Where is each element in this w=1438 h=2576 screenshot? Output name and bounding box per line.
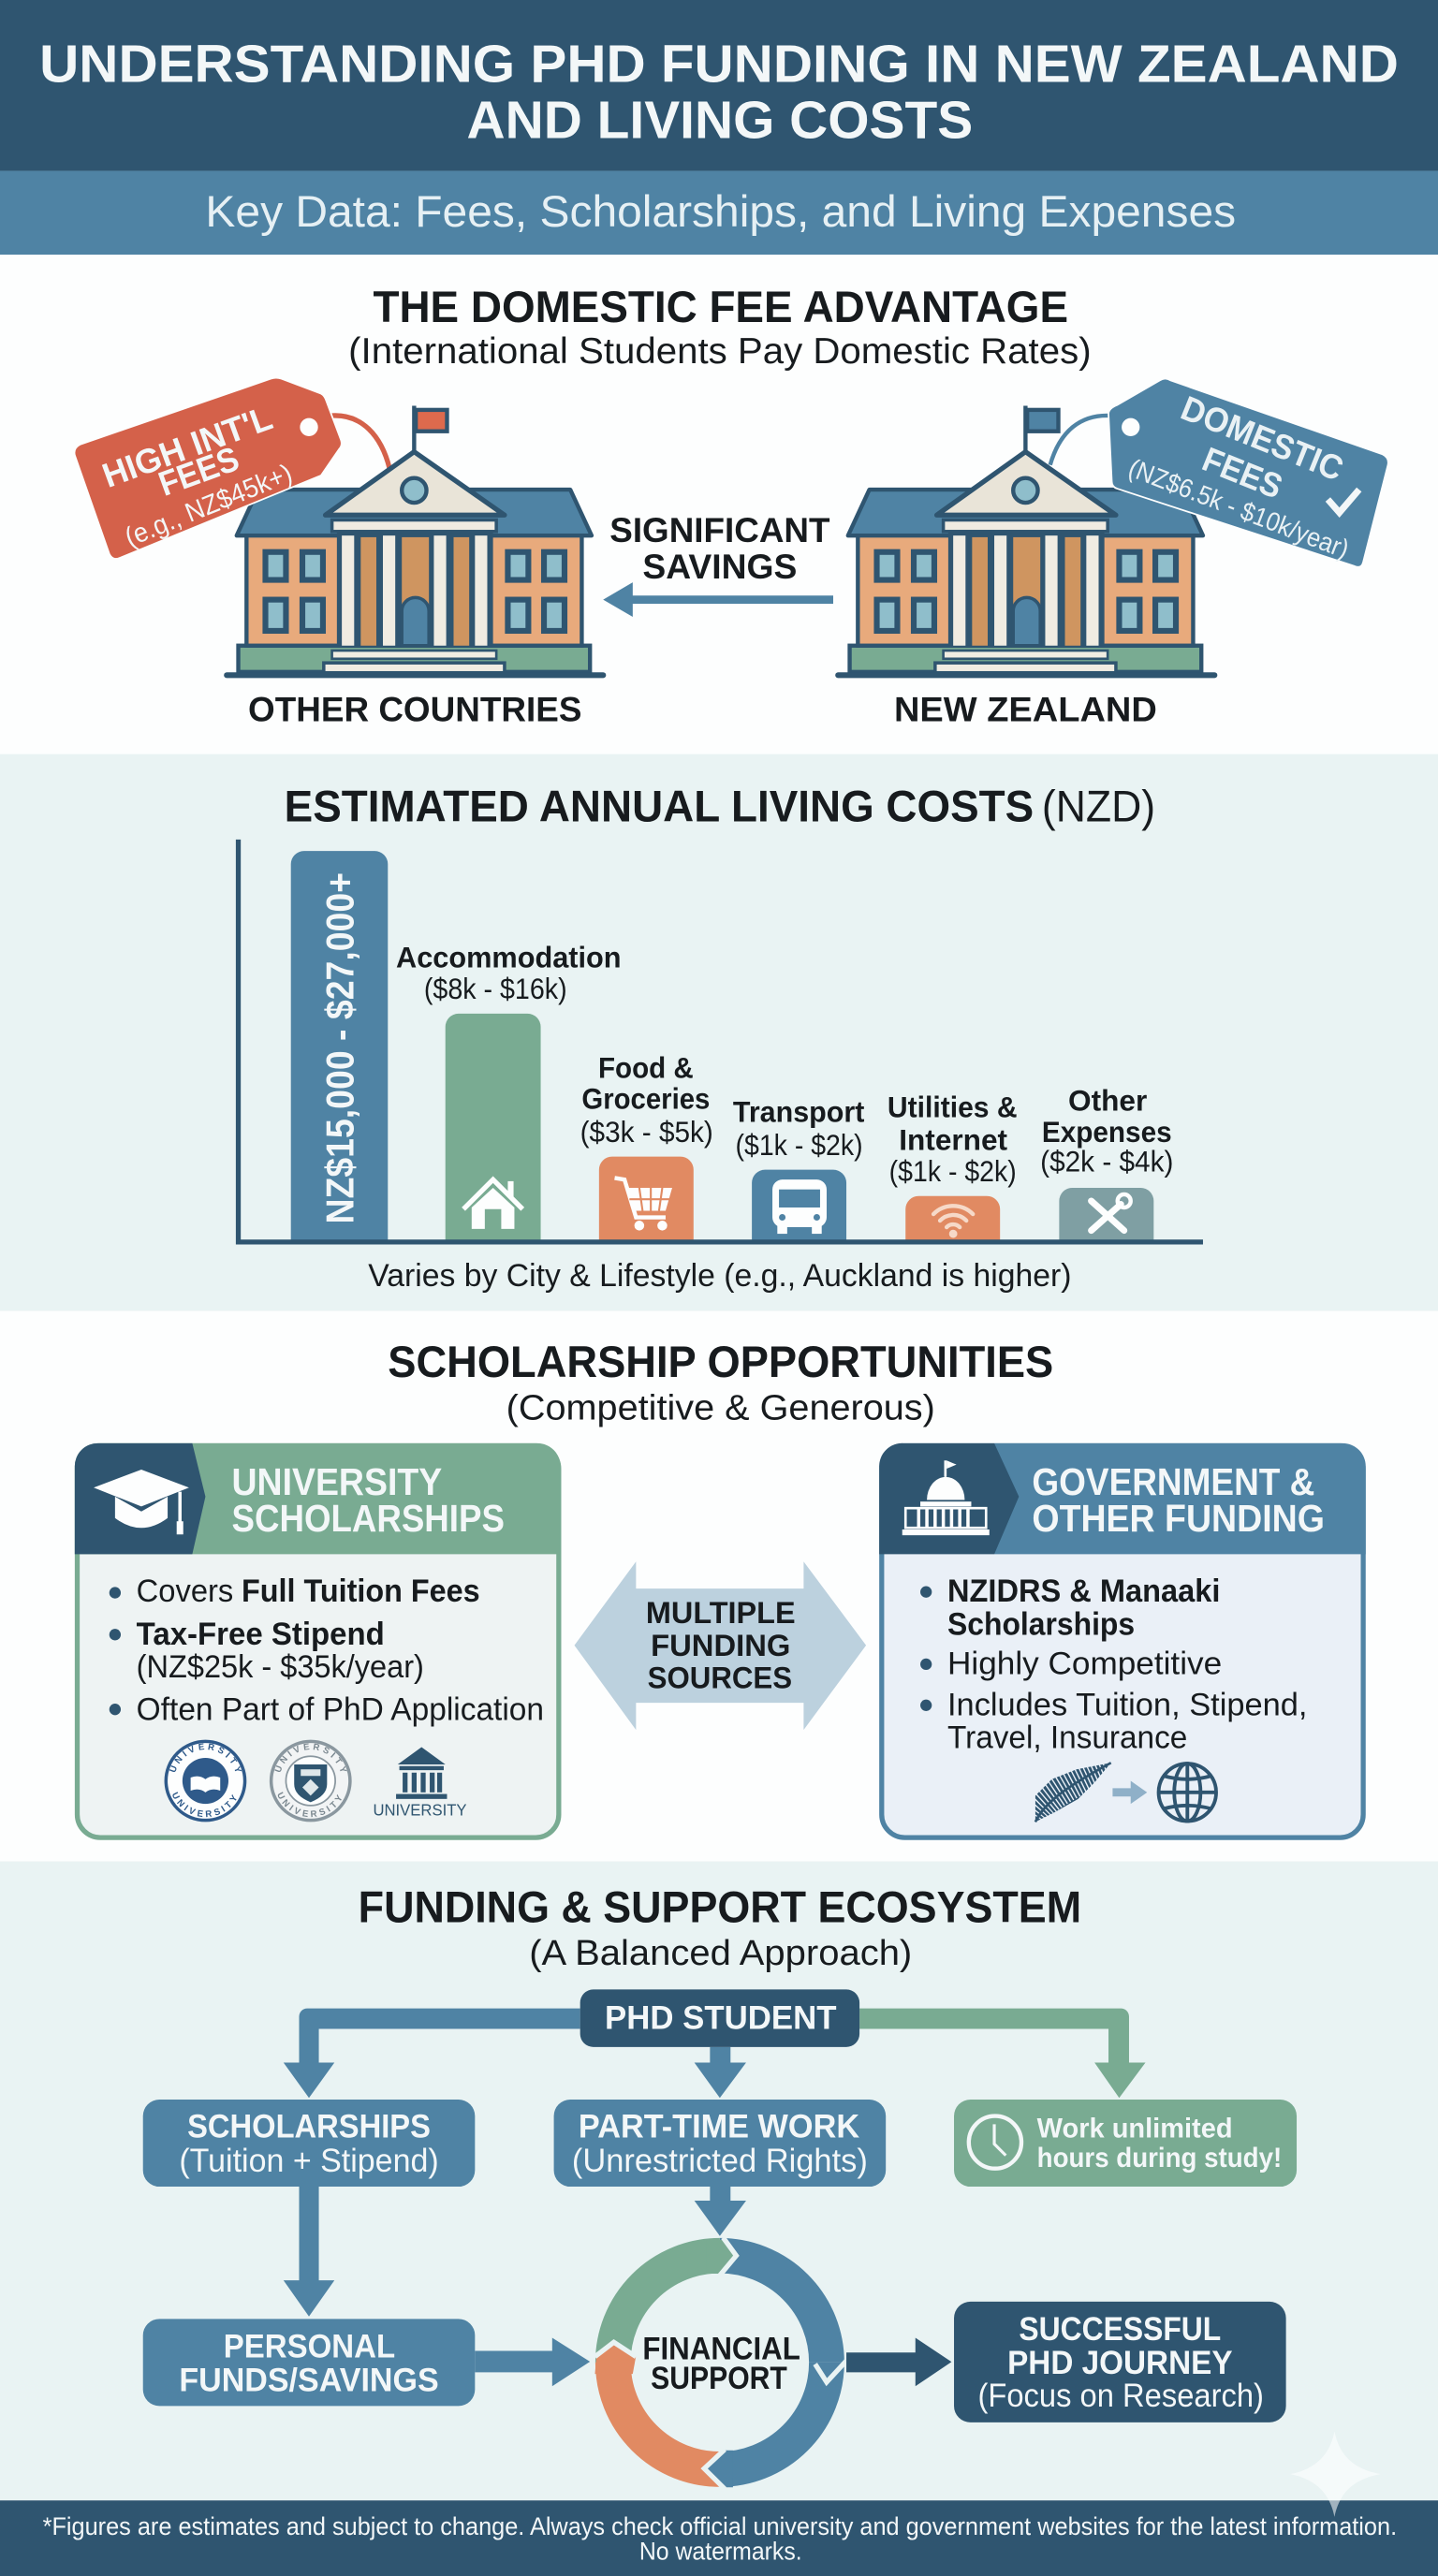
panel: scholarship opportunities [75, 1338, 1366, 1840]
bullet list: Scholarships [947, 1606, 1135, 1642]
arrow: significant savings [603, 511, 833, 617]
icon: university seal grey: UNIVERSITY [277, 1792, 342, 1818]
footer band [0, 2500, 1438, 2576]
arrow: multiple funding sources [575, 1561, 866, 1730]
bullet list: Includes Tuition, Stipend, [947, 1687, 1307, 1722]
icon: high fee price tag: FEES [154, 439, 244, 504]
arrow: scholarships to personal funds [284, 2187, 334, 2317]
heading: ecosystem: FUNDING & SUPPORT ECOSYSTEM [359, 1882, 1081, 1932]
decorative sparkle [1290, 2432, 1381, 2517]
icon: domestic fee price tag: FEES [1197, 440, 1288, 506]
bar: accommodation [396, 941, 622, 1240]
arrow: personal funds to financial support [475, 2338, 590, 2386]
arrow: significant savings: SAVINGS [642, 548, 797, 586]
bullet list: Tax-Free Stipend [137, 1617, 385, 1652]
box: part-time work [554, 2100, 886, 2187]
heading: scholarships [388, 1338, 1053, 1427]
box: successful phd journey: SUCCESSFUL [1019, 2311, 1221, 2348]
bar: utilities and internet: ($1k - $2k) [889, 1154, 1017, 1188]
string: right tag [1050, 416, 1111, 465]
bar: other expenses: Expenses [1042, 1115, 1172, 1149]
card title: OTHER FUNDING [1032, 1497, 1325, 1540]
heading: scholarships: (Competitive & Generous) [506, 1387, 935, 1427]
bar: other expenses [1040, 1083, 1173, 1240]
arrow: multiple funding sources: MULTIPLE [646, 1596, 796, 1630]
bar: utilities and internet: Internet [899, 1123, 1008, 1157]
title: UNDERSTANDING PHD FUNDING IN NEW ZEALAND [39, 35, 1399, 94]
icon: university seal grey [270, 1739, 352, 1822]
icon: building new zealand [838, 406, 1214, 675]
chart axes [239, 840, 1203, 1242]
box: personal funds [143, 2319, 475, 2406]
bullet list: Often Part of PhD Application [137, 1692, 544, 1728]
icon: domestic fee price tag: DOMESTIC [1176, 388, 1349, 489]
panel: living costs [239, 783, 1203, 1294]
title: AND LIVING COSTS [467, 90, 973, 149]
bullet list: (NZ$25k - $35k/year) [137, 1649, 424, 1685]
bullet list: NZIDRS & Manaaki [947, 1573, 1220, 1609]
icon: university seal blue [165, 1739, 247, 1822]
bar: accommodation: ($8k - $16k) [424, 972, 567, 1005]
box: work unlimited hours: hours during study! [1037, 2143, 1282, 2174]
panel: domestic fee advantage [75, 283, 1387, 728]
box: successful phd journey: (Focus on Research) [977, 2378, 1264, 2414]
heading: domestic fee advantage [348, 283, 1092, 372]
box: scholarships: (Tuition + Stipend) [179, 2143, 439, 2179]
bar: transport [733, 1095, 865, 1240]
icon: government building [902, 1460, 990, 1535]
subtitle band: Key Data: Fees, Scholarships, and Living Expenses [205, 187, 1236, 237]
box: part-time work: PART-TIME WORK [579, 2108, 860, 2144]
heading: domestic fee advantage: (International Students Pay Domestic Rates) [348, 331, 1092, 372]
bar: accommodation: Accommodation [396, 941, 622, 974]
heading: ecosystem [359, 1882, 1081, 1972]
bullet list [920, 1573, 1307, 1755]
icon: university seal grey: UNIVERSITY [274, 1743, 346, 1772]
panel: funding ecosystem [143, 1882, 1297, 2489]
card title [1032, 1460, 1325, 1540]
arrow: multiple funding sources: FUNDING [651, 1629, 790, 1662]
icon: university temple [373, 1748, 467, 1819]
bullet list [110, 1573, 544, 1728]
icon: graduation cap [94, 1470, 189, 1534]
arrow: student to work rights [859, 2009, 1146, 2098]
arrow: financial support to successful journey [846, 2338, 951, 2386]
bar: food and groceries: Food & [598, 1050, 694, 1084]
arrow: part-time work to financial support [695, 2187, 746, 2236]
chart: financial support ring: SUPPORT [651, 2361, 787, 2396]
chart: financial support ring [594, 2237, 846, 2489]
header banner [0, 0, 1438, 171]
bar: food and groceries: ($3k - $5k) [580, 1115, 713, 1149]
label: other countries: OTHER COUNTRIES [248, 690, 581, 728]
footer band: No watermarks. [639, 2536, 802, 2565]
box: personal funds: PERSONAL [224, 2329, 395, 2365]
arrow: multiple funding sources: SOURCES [648, 1661, 792, 1694]
bar: total range: NZ$15,000 - $27,000+ [317, 872, 361, 1224]
box: scholarships: SCHOLARSHIPS [187, 2108, 431, 2144]
icon: domestic fee price tag: (NZ$6.5k - $10k/year) [1124, 453, 1353, 564]
bullet list: Travel, Insurance [947, 1720, 1187, 1755]
box: phd student [580, 1989, 859, 2047]
box: phd student: PHD STUDENT [605, 2000, 837, 2037]
bullet list: Full Tuition Fees [242, 1573, 480, 1609]
icon: high fee price tag [75, 379, 341, 558]
icon: university seal blue: UNIVERSITY [172, 1792, 236, 1818]
bar: other expenses: Other [1068, 1083, 1147, 1117]
string: left tag [332, 416, 389, 468]
icon: high fee price tag: HIGH INT'L [97, 399, 277, 495]
icon: university seal blue: UNIVERSITY [169, 1743, 242, 1772]
note: varies by city: Varies by City & Lifestyle (e.g., Auckland is higher) [368, 1258, 1072, 1294]
card title: SCHOLARSHIPS [232, 1497, 505, 1540]
box: work unlimited hours: Work unlimited [1037, 2113, 1233, 2144]
heading: scholarships: SCHOLARSHIP OPPORTUNITIES [388, 1338, 1053, 1387]
heading: living costs: (NZD) [1042, 783, 1155, 832]
card: university scholarships [75, 1443, 562, 1840]
icon: clock [969, 2116, 1021, 2169]
box: successful phd journey: PHD JOURNEY [1007, 2345, 1233, 2381]
heading: living costs: ESTIMATED ANNUAL LIVING COSTS [285, 783, 1034, 832]
label: new zealand: NEW ZEALAND [894, 690, 1157, 728]
bar: food and groceries [580, 1050, 713, 1240]
bar chart: annual living costs [239, 840, 1203, 1242]
title [39, 35, 1399, 149]
bar: food and groceries: Groceries [581, 1082, 710, 1116]
bar: utilities and internet: Utilities & [888, 1090, 1018, 1123]
bar: other expenses: ($2k - $4k) [1040, 1144, 1173, 1178]
bar: utilities and internet [888, 1090, 1018, 1240]
heading: ecosystem: (A Balanced Approach) [529, 1933, 912, 1972]
icon: small arrow [1112, 1781, 1147, 1804]
icon: globe [1159, 1764, 1216, 1822]
arrow: student to part-time work [695, 2047, 746, 2098]
icon: building other countries [227, 406, 603, 675]
card title: UNIVERSITY [232, 1460, 442, 1503]
box: part-time work: (Unrestricted Rights) [572, 2143, 868, 2179]
card: government and other funding [879, 1443, 1366, 1837]
heading: domestic fee advantage: THE DOMESTIC FEE ADVANTAGE [373, 283, 1068, 332]
bullet list: Highly Competitive [947, 1646, 1222, 1681]
box: scholarships [143, 2100, 475, 2187]
bar: transport: Transport [733, 1095, 865, 1129]
box: personal funds: FUNDS/SAVINGS [179, 2363, 439, 2399]
chart: financial support ring: FINANCIAL [642, 2331, 800, 2366]
icon: high fee price tag: (e.g., NZ$45k+) [121, 459, 297, 553]
arrow: student to scholarships [284, 2009, 580, 2098]
icon: university temple: UNIVERSITY [373, 1800, 467, 1819]
bar: total range [291, 851, 388, 1240]
box: successful phd journey [954, 2302, 1286, 2422]
icon: silver fern [1032, 1763, 1111, 1822]
bullet list: Covers [137, 1573, 233, 1609]
arrow: significant savings: SIGNIFICANT [609, 511, 830, 549]
card title [232, 1460, 505, 1540]
bar: transport: ($1k - $2k) [736, 1128, 863, 1162]
icon: domestic fee price tag [1109, 379, 1387, 566]
card title: GOVERNMENT & [1032, 1460, 1314, 1503]
box: work unlimited hours [954, 2100, 1297, 2187]
subtitle band [0, 171, 1438, 255]
